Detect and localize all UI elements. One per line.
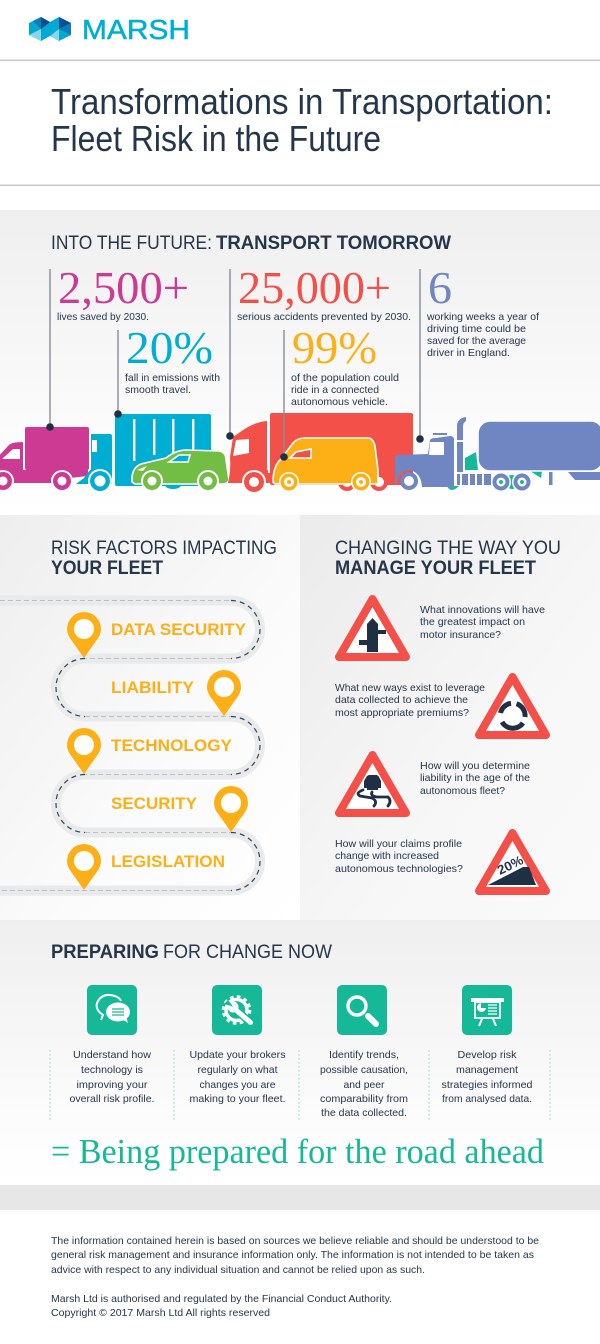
disclaimer: Copyright © 2017 Marsh Ltd All rights reserved: [51, 1307, 270, 1319]
vehicle: blue truck: [76, 414, 211, 493]
step 1 text: [70, 1049, 154, 1105]
step 4 text: strategies informed: [442, 1079, 533, 1091]
icon: gear and wrench: [212, 985, 262, 1035]
vehicle: orange van: [273, 438, 378, 492]
step 3 text: possible causation,: [320, 1064, 408, 1076]
risk: liability: LIABILITY: [111, 678, 195, 697]
question 3: [420, 760, 530, 797]
heading: transport tomorrow: TRANSPORT TOMORROW: [216, 233, 451, 254]
step 4 text: Develop risk: [458, 1049, 517, 1061]
step 2 text: Update your brokers: [190, 1049, 286, 1061]
question 1: motor insurance?: [420, 629, 501, 641]
step 1 text: technology is: [81, 1064, 143, 1076]
stat: 20%: fall in emissions with: [125, 372, 220, 384]
stat: 6: driver in England.: [427, 347, 510, 359]
step 1 text: Understand how: [73, 1049, 151, 1061]
risk: legislation: LEGISLATION: [111, 852, 225, 871]
step 2 text: regularly on what: [198, 1064, 278, 1076]
question 4: autonomous technologies?: [335, 863, 463, 875]
step 4 text: management: [456, 1064, 518, 1076]
step 2 text: making to your fleet.: [190, 1093, 286, 1105]
dotted column separators: [50, 1050, 550, 1120]
icon: chat bubbles: [87, 985, 137, 1035]
stat: 99%: [291, 322, 399, 408]
stat: 20%: [125, 322, 220, 396]
road sign: slippery road: [339, 755, 406, 813]
vehicle: purple tanker truck: [395, 417, 600, 492]
winding road: [0, 600, 260, 890]
stat: 6: driving time could be: [427, 323, 526, 335]
question 1: the greatest impact on: [420, 616, 525, 628]
vehicles illustration: [0, 413, 600, 494]
title: [51, 81, 553, 159]
step 3 text: comparability from: [320, 1093, 408, 1105]
step 3 text: [320, 1049, 408, 1119]
stat: 6: saved for the average: [427, 335, 526, 347]
disclaimer: general risk management and insurance information only. The information is not intended to be taken as: [51, 1249, 534, 1261]
stat: 20%: 20%: [126, 322, 213, 373]
tagline: = Being prepared for the road ahead: [51, 1132, 544, 1171]
stat: 6: [426, 262, 539, 359]
risk: data security: [67, 612, 247, 658]
stat: 6: working weeks a year of: [426, 311, 539, 323]
question 3: liability in the age of the: [420, 772, 530, 784]
stat: 25,000+: serious accidents prevented by 2030.: [237, 311, 411, 323]
question 3: How will you determine: [420, 760, 530, 772]
step 1 text: overall risk profile.: [70, 1093, 154, 1105]
disclaimer: Marsh Ltd is authorised and regulated by the Financial Conduct Authority.: [51, 1293, 392, 1305]
step 2 text: changes you are: [200, 1079, 276, 1091]
question 2: most appropriate premiums?: [335, 707, 469, 719]
risk: security: SECURITY: [111, 794, 198, 813]
question 4: How will your claims profile: [335, 838, 462, 850]
stat: 99%: ride in a connected: [291, 384, 379, 396]
icon: magnifying glass: [337, 985, 387, 1035]
risk: data security: DATA SECURITY: [111, 620, 247, 639]
stat: 20%: smooth travel.: [125, 384, 191, 396]
disclaimer: The information contained herein is based on sources we believe reliable and should be understood to be: [51, 1235, 539, 1247]
question 3: autonomous fleet?: [420, 785, 505, 797]
logo: Marsh: MARSH: [82, 14, 190, 45]
question 1: [420, 604, 545, 641]
heading: risk factors: YOUR FLEET: [51, 558, 163, 579]
heading: transport tomorrow: [51, 233, 451, 254]
risk: technology: [67, 728, 233, 774]
road sign: steep hill: 20%: [495, 852, 526, 878]
pointer lines: [46, 269, 424, 461]
step 2 text: [190, 1049, 286, 1105]
road sign: crossroads: [339, 599, 406, 657]
step 3 text: and peer: [344, 1079, 385, 1091]
heading: changing the way: CHANGING THE WAY YOU: [335, 538, 561, 559]
disclaimer: [51, 1235, 539, 1319]
logo: Marsh: [29, 14, 190, 45]
stat: 2,500+: 2,500+: [58, 262, 189, 313]
question 1: What innovations will have: [420, 604, 545, 616]
stat: 25,000+: 25,000+: [238, 262, 391, 313]
question 2: What new ways exist to leverage: [335, 682, 485, 694]
risk: legislation: [67, 844, 225, 890]
vehicle: red truck: [228, 413, 413, 494]
question 4: [335, 838, 463, 875]
risk: technology: TECHNOLOGY: [111, 736, 233, 755]
risk: security: [111, 786, 248, 832]
title: Transformations in Transportation:: [51, 81, 553, 122]
heading: preparing: PREPARING: [51, 942, 159, 963]
icon: presentation board: [462, 985, 512, 1035]
heading: risk factors: RISK FACTORS IMPACTING: [51, 538, 277, 559]
heading: preparing: FOR CHANGE NOW: [163, 942, 332, 963]
question 2: [335, 682, 485, 719]
step 1 text: improving your: [76, 1079, 148, 1091]
heading: preparing: [51, 942, 332, 963]
step 4 text: from analysed data.: [442, 1093, 532, 1105]
step 3 text: Identify trends,: [329, 1049, 399, 1061]
stat: 99%: of the population could: [291, 372, 399, 384]
vehicle: pink truck: [0, 427, 89, 492]
heading: transport tomorrow: INTO THE FUTURE:: [51, 233, 212, 254]
title: Fleet Risk in the Future: [51, 118, 381, 159]
question 4: change with increased: [335, 850, 439, 862]
heading: changing the way: MANAGE YOUR FLEET: [335, 558, 536, 579]
stat: 6: 6: [428, 262, 452, 313]
vehicle: green car: [132, 450, 229, 492]
step 4 text: [442, 1049, 533, 1105]
heading: risk factors: [51, 538, 277, 579]
disclaimer: advice with respect to any individual situation and cannot be relied upon as such.: [51, 1264, 425, 1276]
road sign: roundabout: [479, 677, 546, 735]
step 3 text: the data collected.: [321, 1107, 407, 1119]
road sign: steep hill: [479, 833, 546, 891]
question 2: data collected to achieve the: [335, 694, 468, 706]
stat: 99%: autonomous vehicle.: [291, 396, 388, 408]
heading: changing the way: [335, 538, 561, 579]
stat: 99%: 99%: [292, 322, 377, 373]
vehicle: green truck behind tanker: [447, 452, 542, 490]
stat: 2,500+: lives saved by 2030.: [57, 311, 149, 323]
risk: liability: [111, 670, 241, 716]
